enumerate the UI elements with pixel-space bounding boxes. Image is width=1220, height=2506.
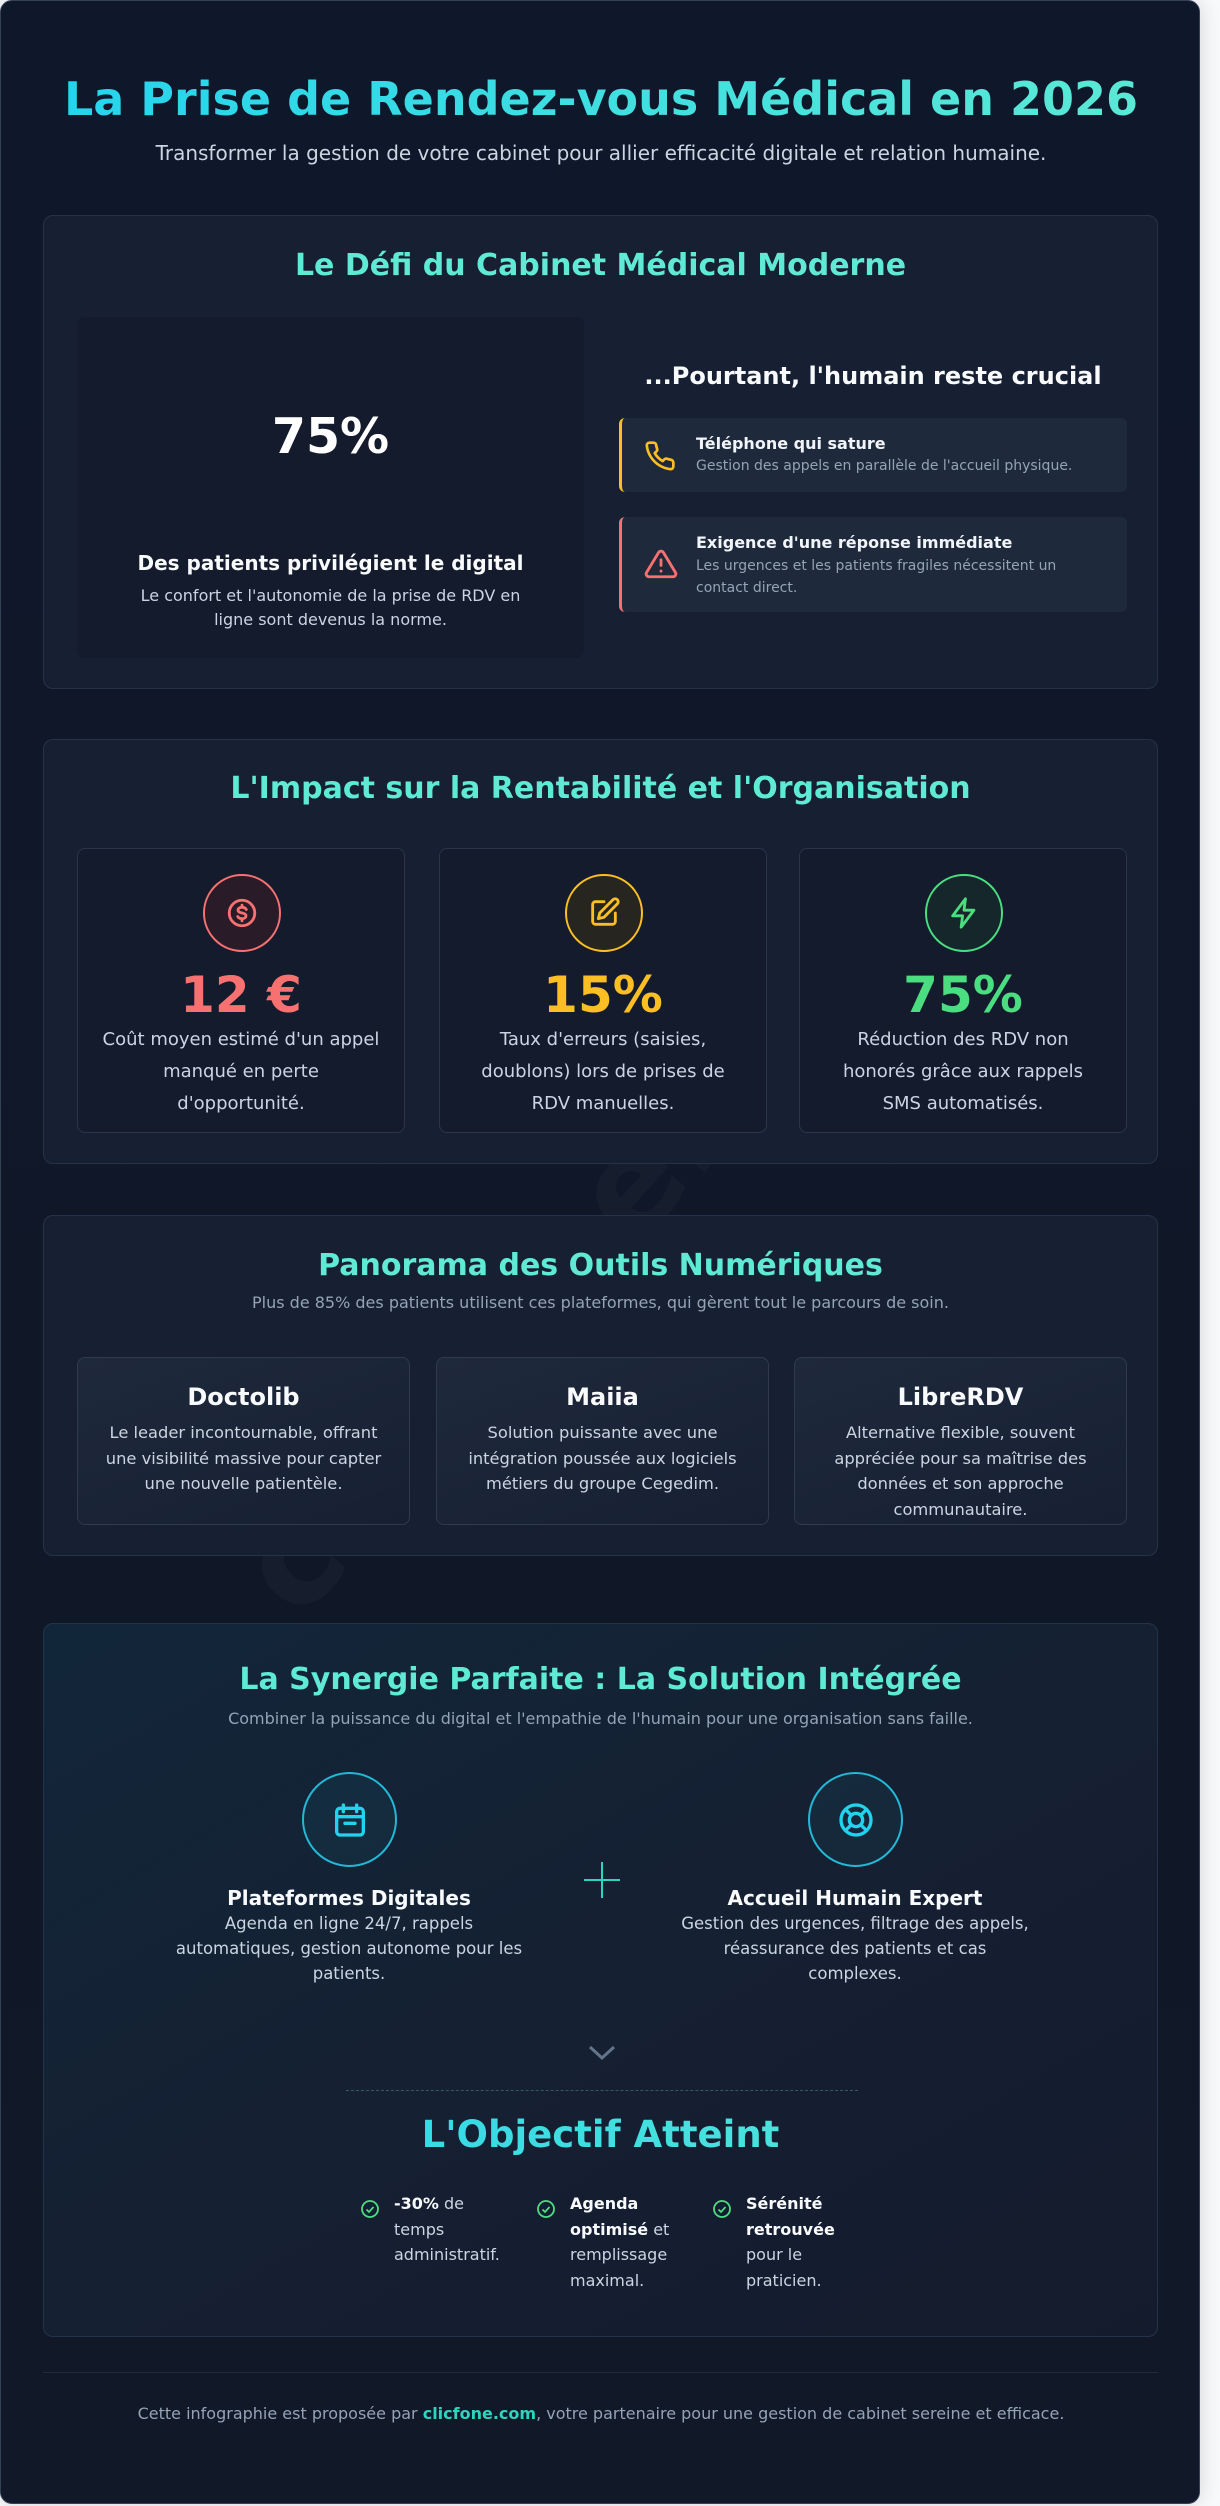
- stat value: 75%: [272, 408, 389, 465]
- watermark: clicfone.com: [206, 828, 963, 1644]
- card: 75%: [799, 848, 1127, 1133]
- name: Plateformes Digitales: [227, 1886, 471, 1910]
- heading: impact: L'Impact sur la Rentabilité et l'Organisation: [230, 771, 971, 806]
- heading: défi: Le Défi du Cabinet Médical Moderne: [295, 248, 906, 283]
- panel: impact: [43, 739, 1158, 1164]
- icon: warning: [644, 550, 678, 578]
- heading: synergie: La Synergie Parfaite : La Solution Intégrée: [239, 1662, 962, 1697]
- card: 12 €: [77, 848, 405, 1133]
- card: 15%: [439, 848, 767, 1133]
- checklist: Agenda optimisé et remplissage maximal.: [570, 2194, 669, 2290]
- item title: Exigence d'une réponse immédiate: [696, 533, 1012, 552]
- subheading: humain: ...Pourtant, l'humain reste crucial: [644, 362, 1102, 390]
- name: LibreRDV: [898, 1383, 1023, 1411]
- heading: outils: Panorama des Outils Numériques: [318, 1248, 883, 1283]
- checklist: Sérénité retrouvée pour le praticien.: [746, 2194, 835, 2290]
- tool: doctolib: [77, 1357, 410, 1525]
- panel: le défi: [43, 215, 1158, 689]
- desc: Solution puissante avec une intégration poussée aux logiciels métiers du groupe Cegedim.: [468, 1423, 737, 1493]
- tool: librerdv: [794, 1357, 1127, 1525]
- name: Doctolib: [187, 1383, 300, 1411]
- desc: Alternative flexible, souvent appréciée pour sa maîtrise des données et son approche communautaire.: [834, 1423, 1087, 1519]
- heading: objectif: L'Objectif Atteint: [422, 2113, 779, 2156]
- check icons: [361, 2200, 379, 2218]
- name: Accueil Humain Expert: [728, 1886, 982, 1910]
- icon: phone: [646, 441, 675, 470]
- value: 15%: [543, 966, 663, 1024]
- item desc: Gestion des appels en parallèle de l'accueil physique.: [696, 458, 1072, 474]
- value: 12 €: [180, 966, 302, 1024]
- column: plateformes: [176, 1772, 522, 1983]
- subtitle: Transformer la gestion de votre cabinet pour allier efficacité digitale et relation humaine.: [156, 141, 1046, 165]
- stat label: Des patients privilégient le digital: [138, 551, 523, 575]
- item: téléphone: [619, 418, 1127, 492]
- checklist: -30% de temps administratif.: [394, 2194, 500, 2264]
- heading: objectif: [44, 2111, 1157, 2159]
- desc: Le leader incontournable, offrant une visibilité massive pour capter une nouvelle patientèle.: [106, 1423, 381, 1493]
- desc: Agenda en ligne 24/7, rappels automatiques, gestion autonome pour les patients.: [176, 1914, 522, 1983]
- column: accueil: [681, 1772, 1029, 1983]
- tool: maiia: [436, 1357, 769, 1525]
- icon: lifebuoy: [808, 1772, 903, 1867]
- subheading: Plus de 85% des patients utilisent ces plateformes, qui gèrent tout le parcours de soin.: [252, 1293, 949, 1312]
- item title: Téléphone qui sature: [696, 434, 886, 453]
- icon: dollar: [203, 874, 281, 952]
- item desc: Les urgences et les patients fragiles nécessitent un contact direct.: [696, 558, 1056, 596]
- title: La Prise de Rendez-vous Médical en 2026: [64, 72, 1138, 126]
- description: Coût moyen estimé d'un appel manqué en perte d'opportunité.: [103, 1029, 379, 1114]
- panel: synergie: [43, 1623, 1158, 2337]
- stat box: 75%: [77, 317, 584, 658]
- desc: Gestion des urgences, filtrage des appels, réassurance des patients et cas complexes.: [681, 1914, 1029, 1983]
- icon: plus: [584, 1862, 620, 1898]
- icon: lightning: [925, 874, 1003, 952]
- footer: Cette infographie est proposée par clicfone.com, votre partenaire pour une gestion de cabinet sereine et efficace.: [138, 2404, 1064, 2423]
- name: Maiia: [566, 1383, 639, 1411]
- description: Taux d'erreurs (saisies, doublons) lors de prises de RDV manuelles.: [481, 1029, 725, 1114]
- icon: calendar: [302, 1772, 397, 1867]
- stat description: Le confort et l'autonomie de la prise de RDV en ligne sont devenus la norme.: [141, 586, 520, 629]
- checklist: [361, 2194, 835, 2290]
- icon: edit: [565, 874, 643, 952]
- value: 75%: [903, 966, 1023, 1024]
- icon: chevron down: [589, 2046, 615, 2060]
- subheading: Combiner la puissance du digital et l'empathie de l'humain pour une organisation sans faille.: [228, 1709, 973, 1728]
- item: urgence: [619, 517, 1127, 612]
- description: Réduction des RDV non honorés grâce aux rappels SMS automatisés.: [843, 1029, 1083, 1114]
- panel: outils: [43, 1215, 1158, 1556]
